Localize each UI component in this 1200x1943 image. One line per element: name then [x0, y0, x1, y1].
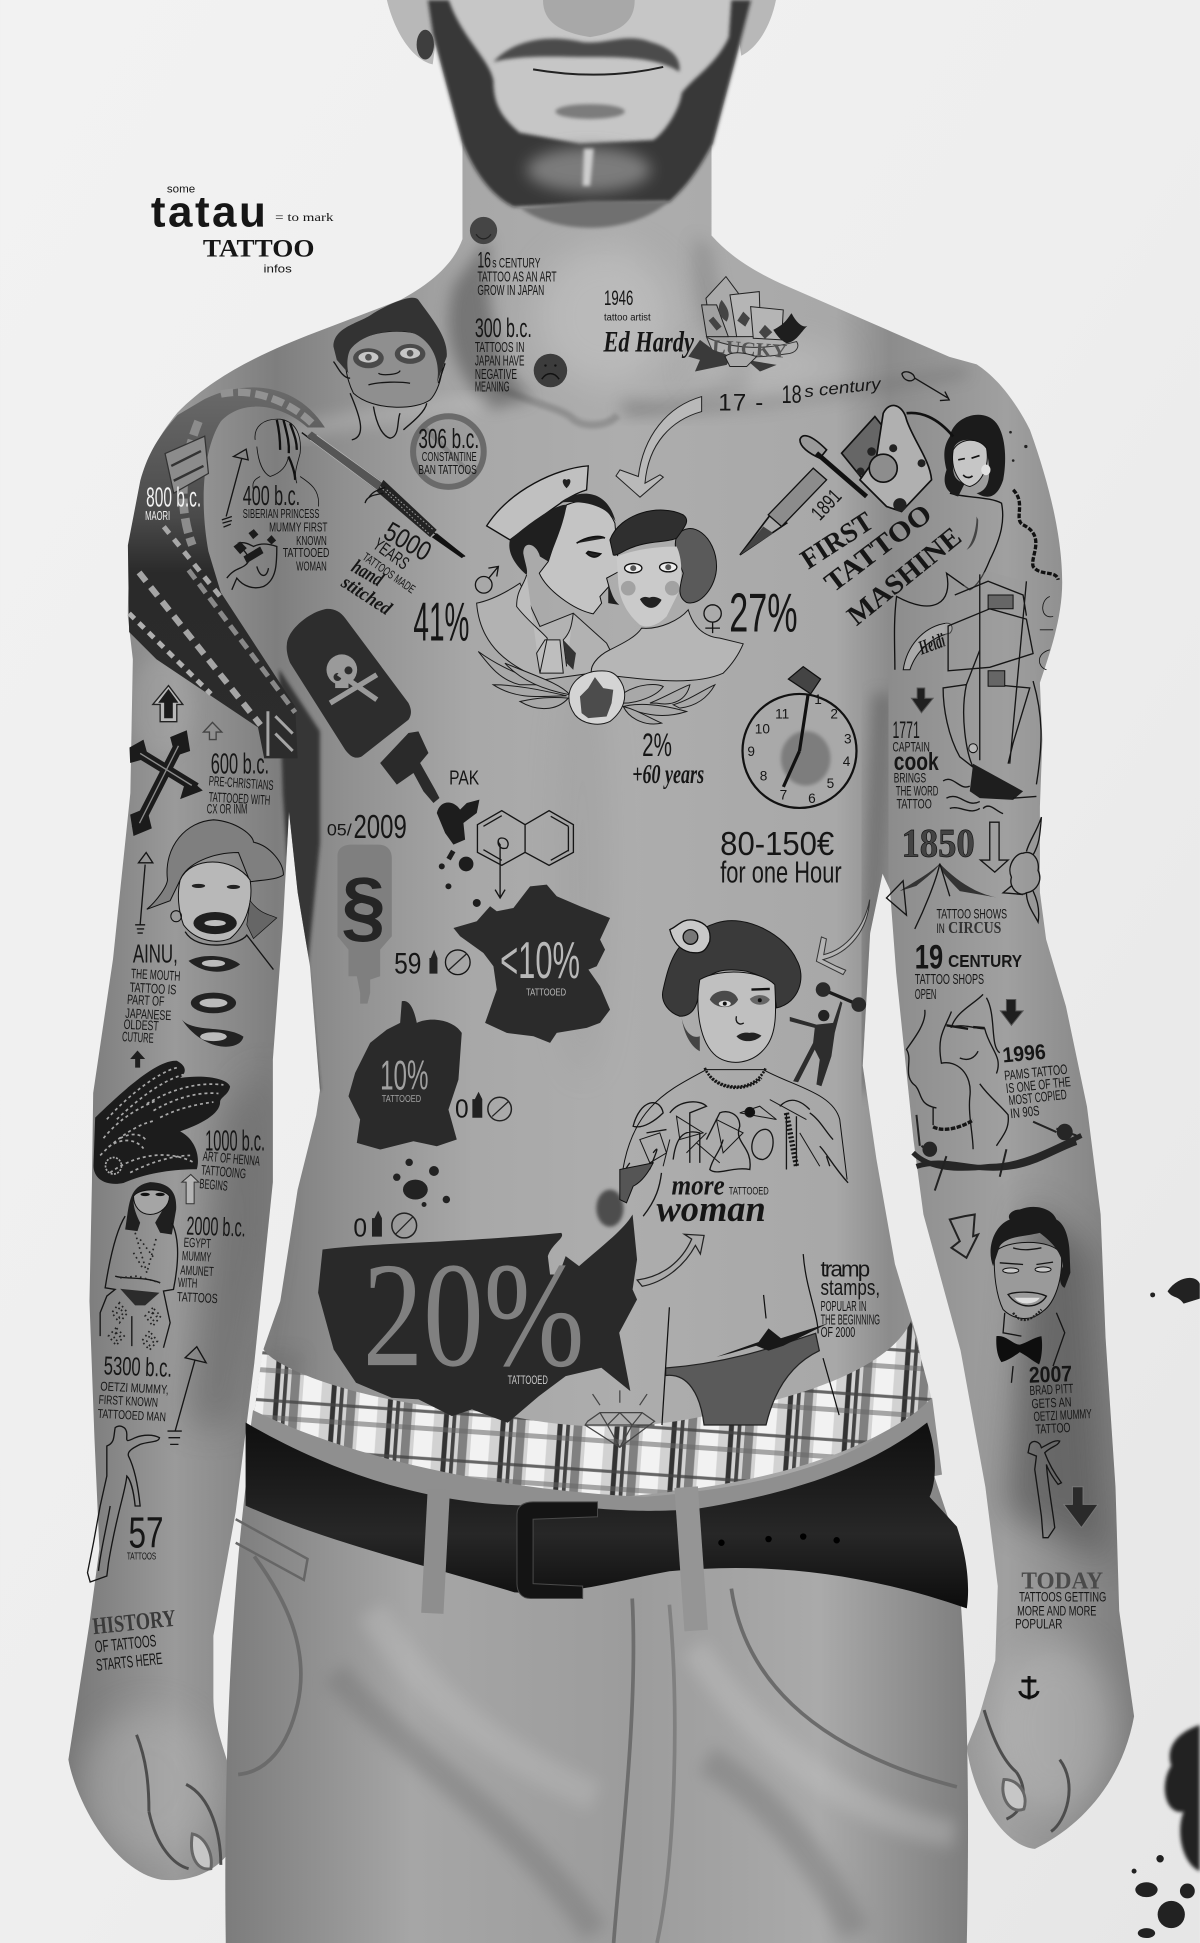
hat	[487, 466, 588, 540]
note: 2000 b.c.: AMUNET	[180, 1262, 214, 1279]
jeans details	[236, 1519, 957, 1943]
icon: paragraph ink bottle	[337, 845, 392, 1004]
note: 306 b.c.: CONSTANTINE	[422, 449, 477, 464]
flower centre	[580, 677, 613, 718]
title block: TATTOO	[203, 234, 315, 262]
note: 19 century: 19	[915, 938, 943, 977]
note: today: POPULAR	[1015, 1616, 1062, 1632]
note: 800 b.c. Maori: MAORI	[145, 509, 170, 523]
rose centre	[683, 930, 698, 944]
illustration: pin-up woman	[894, 415, 1058, 670]
note: history starts here: STARTS HERE	[95, 1649, 163, 1675]
note: tramp stamps	[821, 1256, 880, 1341]
sailor hair	[509, 494, 616, 575]
lady face	[617, 547, 681, 626]
note: 1771 Captain Cook: BRINGS	[894, 770, 926, 786]
illustration: Oetzi figure	[1028, 1441, 1061, 1538]
portrait: tattooed woman	[620, 900, 870, 1230]
jeans waistband	[246, 1398, 942, 1537]
note: 0 bottles banned USA	[353, 1211, 417, 1243]
note: 59 bottles banned: 59	[394, 948, 421, 981]
note: tramp stamps: POPULAR IN	[821, 1299, 866, 1315]
note: 300 b.c.: MEANING	[475, 380, 510, 396]
icon: male symbol arrow	[902, 372, 949, 401]
note: 1996: PAMS TATTOO	[1004, 1061, 1068, 1083]
title block: infos	[264, 263, 292, 275]
stat: male 41%	[413, 566, 498, 652]
map: France: <10%	[500, 931, 580, 989]
map: Germany	[348, 1001, 462, 1150]
left forearm drawings	[88, 1174, 246, 1675]
note: today	[1015, 1569, 1106, 1632]
note: 1996: MOST COPIED	[1008, 1087, 1068, 1108]
stat: 2% over 60 years: +60 years	[632, 759, 704, 789]
note: 306 b.c.	[413, 416, 484, 487]
note: 1946 Ed Hardy: tattoo artist	[604, 313, 651, 324]
body tattoo scribbles	[622, 1068, 848, 1216]
note: 1946 Ed Hardy	[603, 286, 694, 359]
icon: clock: 3	[844, 731, 852, 746]
note: 19 century: CENTURY	[948, 952, 1023, 971]
note: first tattoo machine	[795, 485, 968, 632]
note: 400 b.c.: 400 b.c.	[243, 480, 300, 511]
note: 2007: 2007	[1028, 1360, 1073, 1388]
belt buckle and loops	[421, 1486, 840, 1631]
note: 1996: IS ONE OF THE	[1005, 1074, 1071, 1096]
shoulder, upper chest and pin-up drawings	[603, 277, 1058, 670]
icon: outline up arrow	[182, 1174, 199, 1204]
icon: anchor	[1020, 1676, 1038, 1699]
note: 300 b.c.	[475, 312, 532, 396]
note: 1850	[901, 820, 1008, 872]
illustration: tramp stamp underwear	[662, 1254, 839, 1425]
map: Germany: TATTOOED	[382, 1094, 421, 1105]
icon: arrow down	[911, 688, 933, 713]
note: 300 b.c.: JAPAN HAVE	[475, 354, 524, 370]
stat: 2% over 60 years	[632, 727, 704, 789]
note: 5000 years: TATTOOS MADE	[360, 550, 418, 596]
illustration: sailor and lady	[477, 466, 743, 724]
note: 306 b.c.: BAN TATTOOS	[418, 462, 477, 477]
note: 2007: OETZI MUMMY	[1033, 1406, 1092, 1424]
note: price	[720, 826, 842, 889]
illustration: barbed wire	[913, 1115, 1081, 1191]
note: first tattoo machine: 1891	[807, 485, 846, 525]
note: 2000 b.c.	[177, 1210, 246, 1306]
note: 05/2009: 05/	[327, 821, 352, 840]
sailor jacket	[477, 583, 610, 680]
stat: 57 tattoos: TATTOOS	[127, 1551, 156, 1562]
arrows on arm	[153, 686, 222, 740]
note: first tattoo machine: FIRST	[795, 506, 879, 576]
note: 2007: GETS AN	[1031, 1394, 1072, 1411]
note: 2000 b.c.: EGYPT	[183, 1235, 211, 1251]
icon: clock: 9	[747, 744, 755, 759]
stat: 57 tattoos	[127, 1510, 163, 1562]
note: 1996: IN 90S	[1010, 1103, 1040, 1121]
sailor neck and tie	[517, 575, 573, 673]
icon: molecule	[477, 811, 573, 898]
hair	[662, 921, 801, 1016]
note: 400 b.c.: MUMMY FIRST	[269, 520, 327, 535]
note: more tattooed woman: more	[671, 1170, 725, 1202]
title block: some	[167, 184, 195, 196]
note: 2007: TATTOO	[1035, 1420, 1071, 1437]
icon: clock: 2	[830, 707, 838, 722]
note: tattoo shows in circus: IN	[936, 921, 945, 936]
facial details	[681, 989, 770, 1051]
body shading	[81, 235, 1115, 1859]
heading: 17-18s century: s century	[803, 374, 883, 401]
title block	[151, 184, 333, 275]
note: 1996	[1002, 1040, 1071, 1121]
tattoo body	[621, 1070, 847, 1180]
note: tramp stamps: OF 2000	[821, 1325, 855, 1341]
note: 1000 b.c.: 1000 b.c.	[205, 1125, 265, 1157]
icon: clock: 6	[808, 791, 816, 806]
note: tattoo shows in circus: CIRCUS	[948, 919, 1001, 937]
note: 400 b.c.	[243, 480, 329, 573]
stat: male 41%: 41%	[413, 590, 469, 652]
map: France	[453, 885, 610, 1043]
note: 19 century	[915, 938, 1023, 1003]
note: 19 century: OPEN	[915, 987, 936, 1003]
icon: sad face	[534, 354, 567, 387]
ship and right upper arm drawings	[886, 571, 1081, 1191]
icon: skull ink bottle	[287, 609, 439, 803]
note: 2007: BRAD PITT	[1029, 1381, 1074, 1398]
note: 1771 Captain Cook: 1771	[892, 718, 920, 744]
note: 600 b.c.: PRE-CHRISTIANS	[208, 773, 274, 793]
note: Ainu: JAPANESE	[125, 1006, 172, 1023]
note: 16s century: TATTOO AS AN ART	[477, 269, 557, 285]
note: more tattooed woman	[656, 1170, 769, 1230]
jeans	[225, 1462, 968, 1943]
note: 1771 Captain Cook: cook	[894, 749, 939, 776]
note: Ainu: TATTOO IS	[129, 980, 177, 997]
note: 5300 b.c.: FIRST KNOWN	[98, 1393, 158, 1410]
heart on hat	[563, 479, 570, 488]
note: 5300 b.c.: TATTOOED MAN	[97, 1407, 166, 1424]
tattoo bird on woman's side	[620, 1163, 653, 1203]
note: tramp stamps: THE BEGINNING	[821, 1313, 880, 1329]
flower with Germany	[569, 671, 625, 724]
stat: female 27%: 27%	[729, 581, 798, 643]
note: history starts here: OF TATTOOS	[94, 1631, 157, 1657]
illustration: Pam's tattoo	[906, 994, 1008, 1149]
note: price: for one Hour	[720, 854, 842, 889]
fingers	[137, 1710, 1069, 1869]
stat: 2% over 60 years: 2%	[642, 727, 672, 763]
illustration: Egyptian mummy	[100, 1182, 178, 1350]
note: Ainu: AINU,	[133, 940, 178, 969]
note: 2000 b.c.: 2000 b.c.	[186, 1210, 246, 1243]
icon: tattoo machine	[740, 405, 953, 555]
note: 1771 Captain Cook: CAPTAIN	[892, 739, 930, 755]
icon: clock: 5	[827, 776, 834, 791]
icon: cross	[129, 730, 203, 836]
note: 1771 Captain Cook: TATTOO	[896, 796, 932, 812]
note: 600 b.c.	[207, 748, 274, 817]
skin silhouette	[68, 136, 1134, 1880]
map: USA: 20%	[363, 1232, 584, 1398]
note: 5000 years: hand	[348, 556, 387, 591]
note: 16s century	[477, 248, 557, 299]
note: 1996: 1996	[1002, 1040, 1047, 1068]
heading: 17-18s century	[718, 374, 883, 417]
note: first tattoo machine: MASHINE	[841, 521, 968, 632]
note: 1771 Captain Cook: THE WORD	[896, 783, 939, 798]
lady hair	[610, 510, 687, 555]
note: 2000 b.c.: TATTOOS	[177, 1289, 218, 1306]
note: 5300 b.c.: OETZI MUMMY,	[100, 1379, 169, 1397]
heading: 17-18s century: 17 -	[718, 390, 763, 417]
maori shoulder tattoo	[128, 387, 325, 758]
chemicals and maps panel	[287, 609, 610, 1150]
icon: small up arrow	[130, 1050, 145, 1068]
stat: female 27%	[704, 581, 798, 643]
icon: arrow down	[1000, 1000, 1023, 1025]
ink blots	[437, 800, 481, 907]
icon: long up arrow	[167, 1347, 206, 1444]
note: history starts here: HISTORY	[91, 1606, 177, 1640]
note: 400 b.c.: WOMAN	[296, 558, 327, 573]
icon: lucky cards	[688, 277, 807, 372]
note: 16s century: s CENTURY	[492, 256, 541, 271]
note: 300 b.c.: TATTOOS IN	[475, 340, 524, 356]
note: Ainu: PART OF	[127, 992, 165, 1009]
heading: 17-18s century: 18	[782, 381, 802, 409]
icon: clock: 1	[814, 692, 822, 707]
note: 400 b.c.: KNOWN	[296, 533, 327, 548]
note: 2007	[1028, 1360, 1092, 1437]
note: 1850: 1850	[901, 820, 975, 866]
portrait: Brad Pitt	[991, 1207, 1070, 1383]
note: 05/2009	[327, 809, 407, 846]
lady right curls	[675, 528, 717, 603]
icon: diamond	[585, 1390, 655, 1447]
title block: tatau	[151, 187, 266, 236]
stat: 57 tattoos: 57	[128, 1510, 163, 1558]
arrow: outlined down	[950, 1215, 978, 1258]
icon: henna hand	[94, 1061, 230, 1184]
note: tramp stamps: stamps,	[821, 1275, 880, 1300]
note: first tattoo machine: TATTOO	[819, 498, 938, 599]
note: 1946 Ed Hardy: 1946	[604, 286, 633, 310]
note: 5000 years	[337, 516, 437, 620]
sailor eye	[577, 537, 605, 557]
note: today: MORE AND MORE	[1017, 1602, 1096, 1618]
ink splatter at right edge	[1132, 1278, 1200, 1938]
note: 5000 years: YEARS	[369, 534, 413, 574]
arrow: curved down	[616, 397, 702, 497]
map: USA: TATTOOED	[508, 1374, 548, 1387]
icon: clock: 11	[775, 707, 789, 722]
icon: clock: 7	[780, 787, 787, 802]
note: 600 b.c.: 600 b.c.	[211, 748, 269, 780]
icon: clock: 10	[755, 722, 770, 737]
note: price: 80-150€	[720, 826, 835, 863]
note: today: TODAY	[1021, 1569, 1103, 1595]
note: 16s century: GROW IN JAPAN	[477, 283, 544, 299]
strongman with barbell	[790, 982, 866, 1086]
note: 19 century: TATTOO SHOPS	[915, 972, 984, 988]
leather belt	[246, 1423, 968, 1608]
ink splatter centre	[393, 1159, 450, 1207]
illustration: Siberian princess	[222, 419, 319, 527]
rose	[670, 920, 710, 953]
note: 600 b.c.: TATTOOED WITH	[208, 789, 271, 808]
note: Ainu: CUTURE	[122, 1029, 154, 1046]
icons: tattooed lips	[182, 956, 243, 1047]
icon: neck smiley	[470, 217, 497, 244]
map: Germany: 10%	[380, 1052, 428, 1099]
note: tattoo shows in circus	[936, 906, 1007, 937]
icon: paragraph ink bottle: §	[341, 861, 386, 950]
arrow: up right	[637, 1234, 704, 1286]
tie	[563, 640, 576, 670]
icon: mythical creature	[227, 529, 277, 590]
head: ears, face and beard	[387, 0, 776, 228]
icon: clock: 8	[760, 769, 767, 784]
note: 600 b.c.: CX OR INM	[207, 801, 247, 817]
note: tramp stamps: tramp	[821, 1256, 870, 1281]
note: 16s century: 16	[477, 248, 491, 273]
note: 0 bottles banned Germany	[455, 1092, 511, 1124]
note: 5000 years: 5000	[379, 516, 437, 567]
note: 300 b.c.: NEGATIVE	[475, 367, 517, 383]
title block: = to mark	[275, 210, 333, 224]
icon: clock: 4	[843, 754, 851, 769]
lady details	[608, 563, 680, 608]
note: 1000 b.c.	[199, 1125, 265, 1194]
note: 1946 Ed Hardy: Ed Hardy	[603, 326, 694, 359]
note: 800 b.c. Maori: 800 b.c.	[146, 482, 201, 513]
note: 306 b.c.: 306 b.c.	[418, 423, 479, 454]
note: 800 b.c. Maori	[145, 482, 201, 523]
illustration: pin-up woman: Heidi	[915, 630, 949, 660]
note: 5300 b.c.: 5300 b.c.	[103, 1350, 173, 1383]
note: 2000 b.c.: MUMMY	[182, 1248, 212, 1265]
sailor face	[539, 501, 619, 614]
map: France: TATTOOED	[526, 988, 566, 999]
note: tattoo shows in circus: TATTOO SHOWS	[936, 906, 1007, 922]
note: Ainu: OLDEST	[123, 1017, 159, 1034]
portrait: old man	[333, 298, 447, 440]
note: 5300 b.c.	[97, 1350, 173, 1424]
face	[698, 972, 776, 1062]
illustration: Oetzi figure	[88, 1426, 159, 1582]
note: 5000 years: stitched	[337, 572, 395, 620]
label: PAK: PAK	[449, 767, 479, 790]
note: more tattooed woman: TATTOOED	[729, 1186, 769, 1198]
note: 400 b.c.: TATTOOED	[283, 545, 329, 560]
note: 0 bottles banned Germany: 0	[455, 1094, 469, 1124]
note: 300 b.c.: 300 b.c.	[475, 312, 532, 343]
note: 1771 Captain Cook	[892, 718, 939, 812]
icon: bow tie	[996, 1336, 1042, 1364]
note: 1000 b.c.: BEGINS	[199, 1176, 228, 1194]
right forearm drawings	[950, 1207, 1106, 1699]
icon: lucky cards: LUCKY	[711, 337, 788, 363]
note: 400 b.c.: SIBERIAN PRINCESS	[243, 506, 320, 521]
note: 59 bottles banned	[394, 948, 470, 981]
note: Ainu	[122, 940, 181, 1046]
note: more tattooed woman: woman	[656, 1189, 766, 1230]
icon: arrow down dark	[1064, 1487, 1098, 1528]
note: 0 bottles banned USA: 0	[353, 1213, 367, 1243]
note: 1000 b.c.: TATTOOING	[201, 1162, 247, 1181]
note: Ainu: THE MOUTH	[131, 966, 181, 984]
icon: clock	[743, 667, 857, 808]
note: history starts here	[91, 1606, 181, 1675]
map: USA	[318, 1214, 637, 1423]
left arm upper drawings	[94, 686, 283, 1194]
portrait: Ainu woman	[135, 820, 283, 970]
note: 2000 b.c.: WITH	[178, 1275, 198, 1291]
icon: sailing ship	[943, 571, 1041, 814]
icon: circus tent	[886, 864, 1000, 929]
icon: rose	[1003, 817, 1041, 922]
note: 05/2009: 2009	[353, 809, 407, 846]
laurel leaves	[478, 651, 715, 724]
plaid boxers	[254, 1321, 932, 1497]
arrow: curved toward woman	[816, 900, 870, 975]
icon: hand stitch needle	[302, 432, 465, 558]
lady shoulders	[591, 610, 743, 681]
note: 1000 b.c.: ART OF HENNA	[202, 1148, 261, 1169]
drawings around left shoulder	[145, 298, 498, 652]
note: today: TATTOOS GETTING	[1019, 1589, 1106, 1605]
